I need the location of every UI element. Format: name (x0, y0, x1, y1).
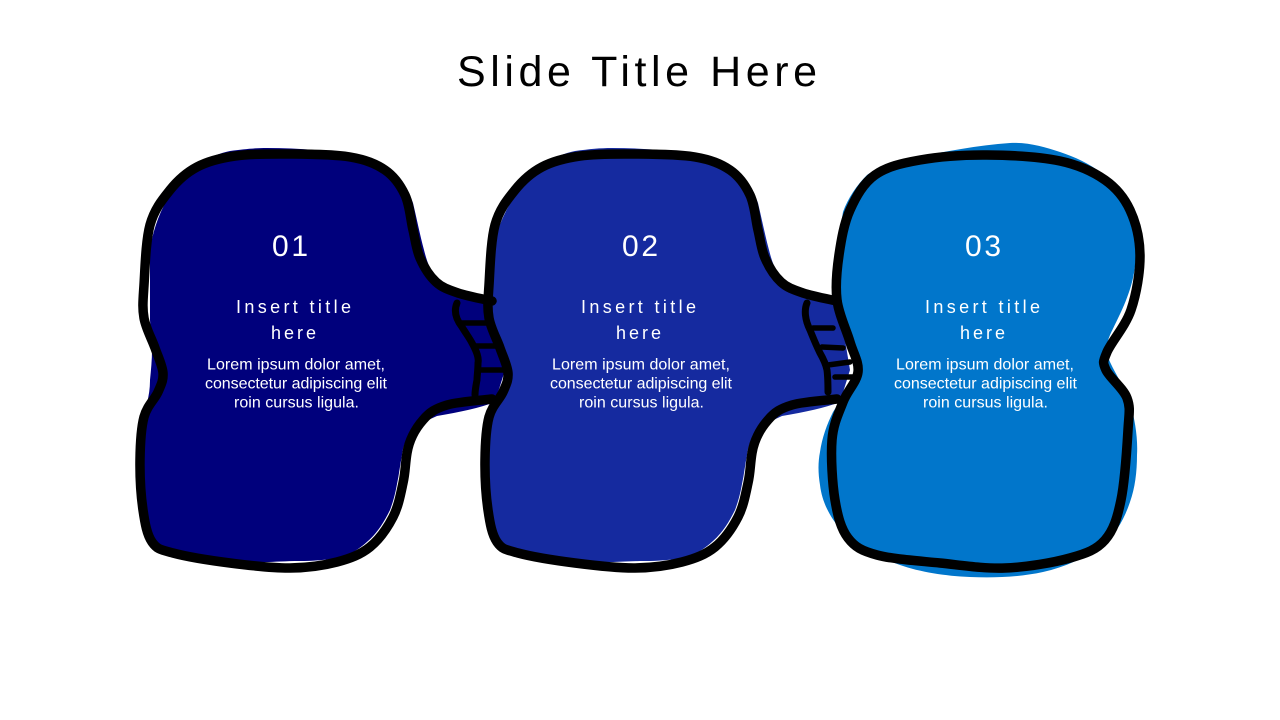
heading 01: here (271, 323, 316, 343)
body 02: Lorem ipsum dolor amet, (552, 356, 730, 374)
number 03: 03 (965, 230, 1001, 263)
heading 03: Insert title (925, 297, 1040, 317)
body 03 (894, 356, 1078, 412)
body 01: consectetur adipiscing elit (205, 376, 388, 392)
body 02: consectetur adipiscing elit (550, 376, 733, 392)
body 03: consectetur adipiscing elit (894, 376, 1078, 392)
panel 01 text (205, 230, 388, 412)
title: Slide Title Here (457, 48, 817, 96)
body 03: Lorem ipsum dolor amet, (896, 356, 1074, 374)
panel 02 fill (481, 148, 850, 563)
panel 01 outline (140, 154, 492, 568)
body 01 (205, 356, 388, 412)
heading 02: here (616, 323, 661, 343)
body 03: roin cursus ligula. (923, 394, 1048, 412)
connector ladder between panels 01 and 02 (455, 303, 503, 395)
panel 03 text (894, 230, 1078, 412)
heading 03 (925, 297, 1040, 343)
panel 02 outline (485, 154, 837, 568)
heading 03: here (960, 323, 1005, 343)
panel 03 fill (818, 143, 1137, 577)
number 02: 02 (622, 230, 658, 263)
heading 02: Insert title (581, 297, 696, 317)
connector ladder between panels 02 and 03 (805, 303, 853, 392)
body 01: roin cursus ligula. (234, 394, 359, 412)
body 01: Lorem ipsum dolor amet, (207, 356, 385, 374)
panel 02 text (550, 230, 733, 412)
heading 02 (581, 297, 696, 343)
number 01: 01 (272, 230, 308, 263)
panel 03 outline (832, 155, 1140, 568)
body 02 (550, 356, 733, 412)
heading 01 (236, 297, 351, 343)
heading 01: Insert title (236, 297, 351, 317)
panel 01 fill (140, 148, 505, 563)
body 02: roin cursus ligula. (579, 394, 704, 412)
